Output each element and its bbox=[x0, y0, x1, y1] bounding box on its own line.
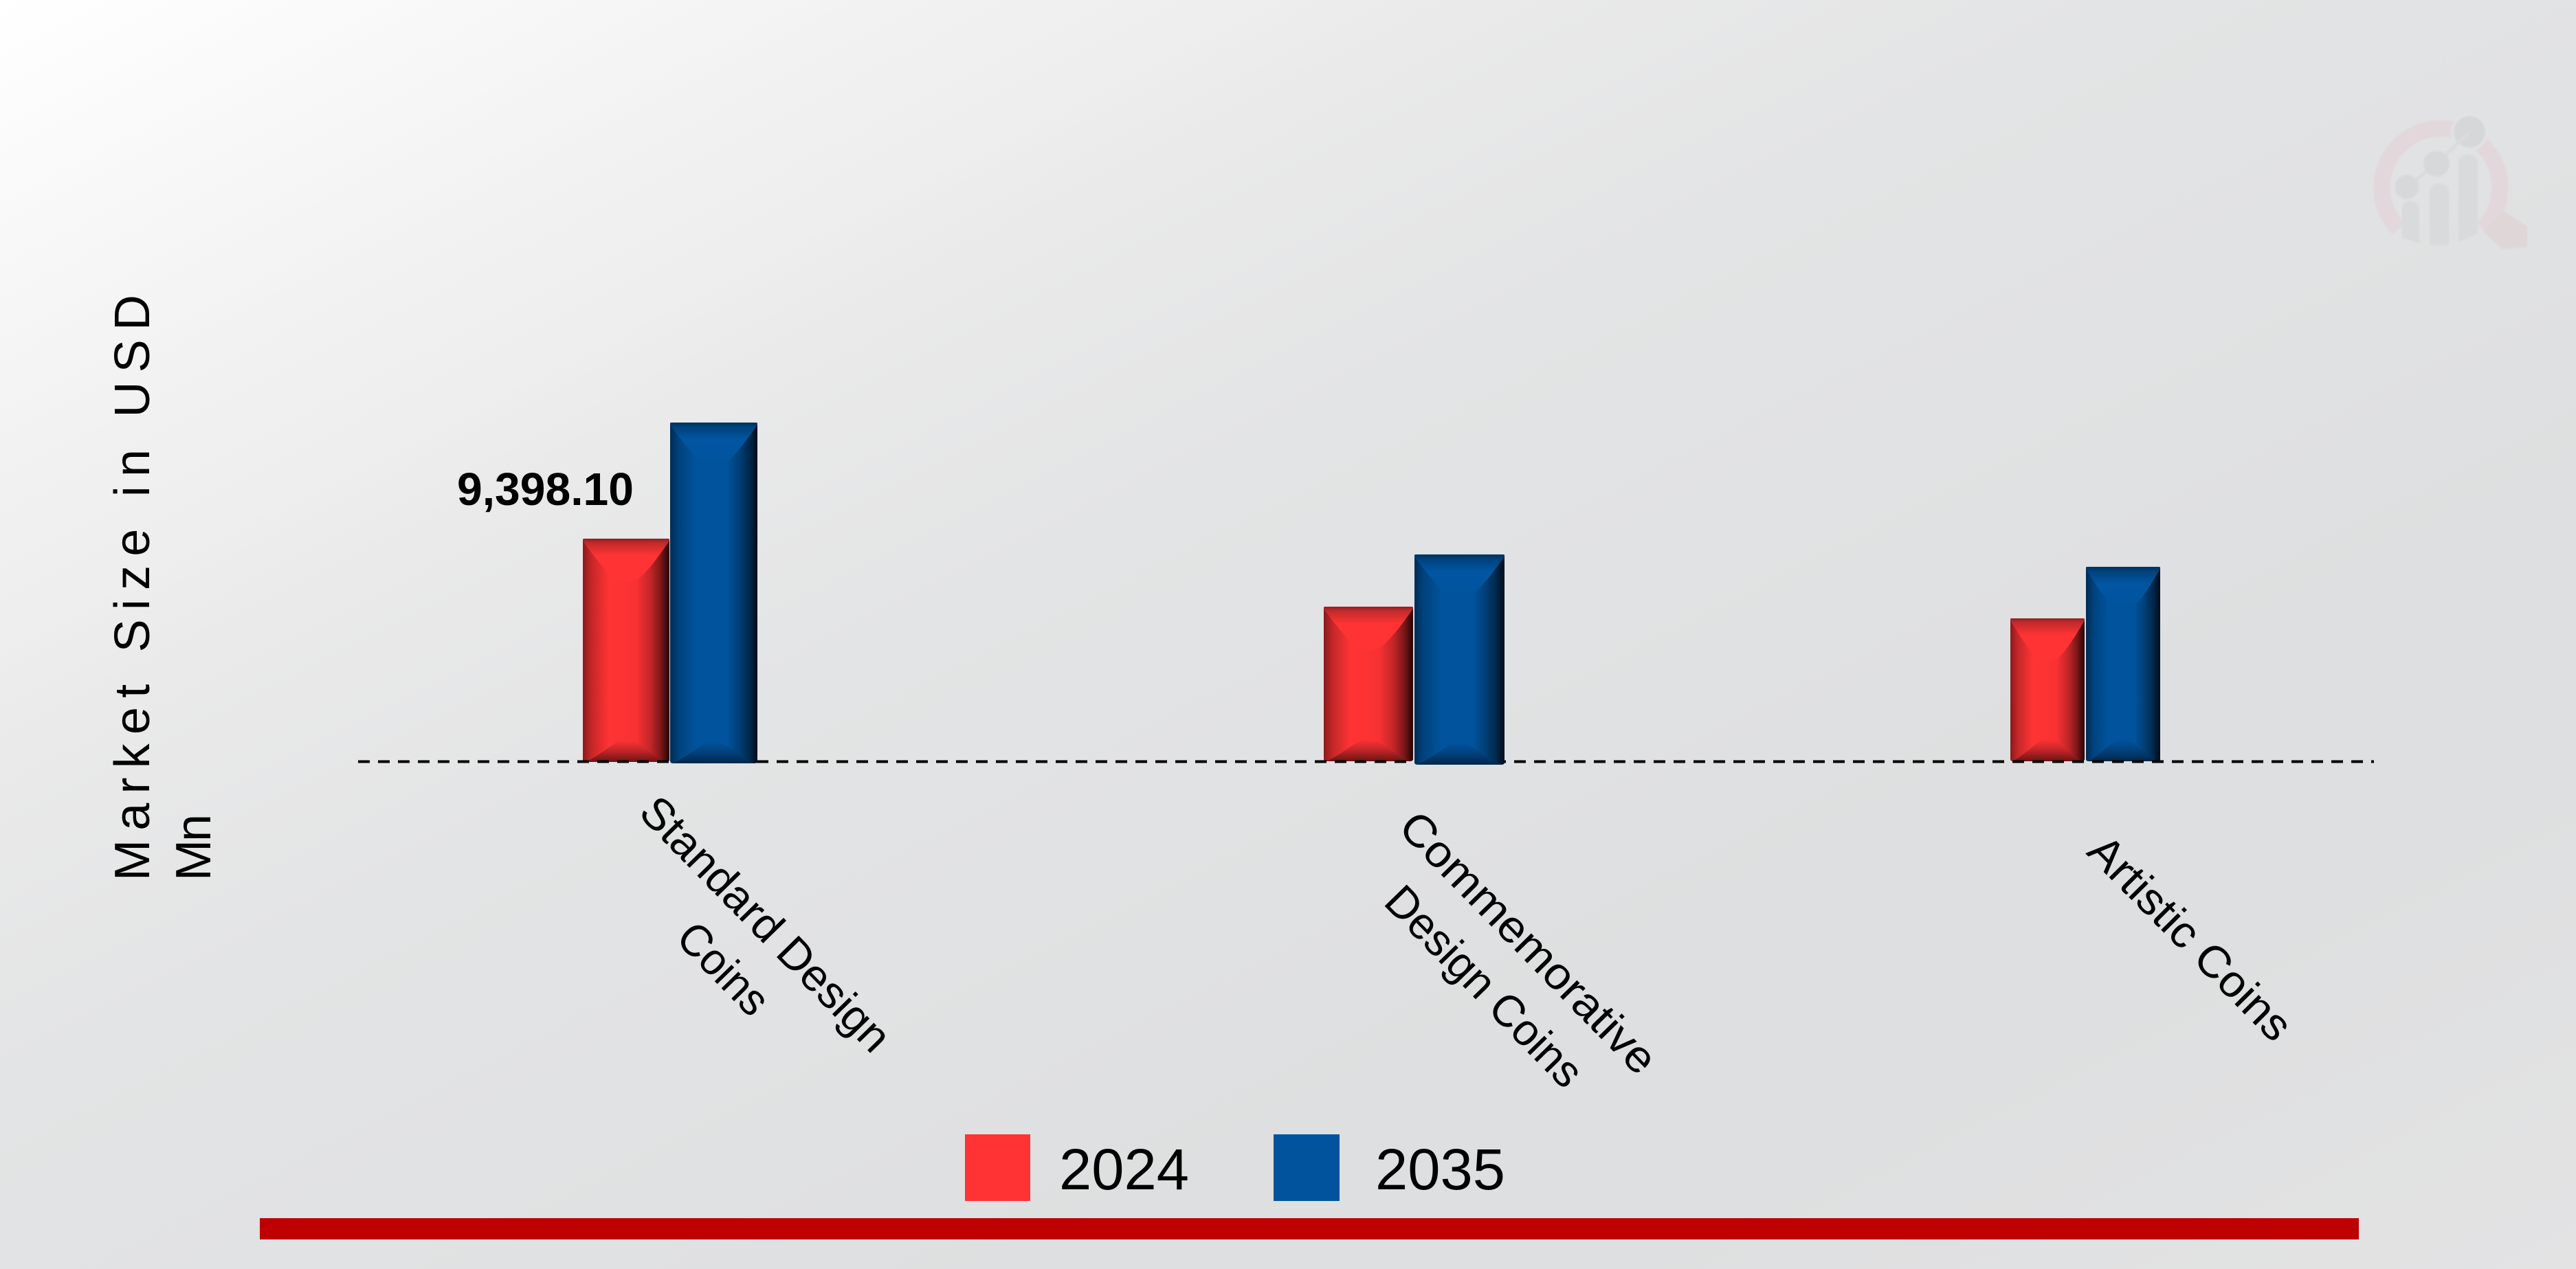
legend swatch: 2035 bbox=[1274, 1134, 1340, 1201]
x-axis label: Artistic Coins: Artistic Coins bbox=[2078, 824, 2302, 1051]
dashed baseline bbox=[358, 760, 2374, 763]
bar: Artistic Coins 2024 bbox=[2010, 618, 2085, 761]
legend label: 2035: 2035 bbox=[1375, 1137, 1505, 1202]
y-axis title: Mn bbox=[166, 814, 221, 881]
legend label: 2024: 2024 bbox=[1059, 1137, 1189, 1202]
icon: watermark logo bbox=[2382, 113, 2527, 249]
data label: 9,398.10: 9,398.10 bbox=[457, 464, 634, 515]
bar: Commemorative Design Coins 2024 bbox=[1324, 607, 1413, 761]
y-axis title bbox=[105, 295, 221, 881]
y-axis title: Market Size in USD bbox=[105, 295, 160, 881]
bar: Standard Design Coins 2035 bbox=[670, 423, 757, 763]
bar: Standard Design Coins 2024 bbox=[583, 539, 669, 762]
x-axis label: Standard Design Coins: Coins bbox=[667, 912, 780, 1025]
bar: Commemorative Design Coins 2035 bbox=[1414, 554, 1504, 765]
legend swatch: 2024 bbox=[965, 1134, 1030, 1201]
bar: Artistic Coins 2035 bbox=[2086, 567, 2160, 761]
x-axis label: Commemorative Design Coins: Commemorative bbox=[1390, 801, 1667, 1083]
x-axis label: Commemorative Design Coins: Design Coins bbox=[1375, 875, 1594, 1097]
x-axis label: Standard Design Coins: Standard Design bbox=[630, 786, 901, 1062]
legend bbox=[965, 1134, 1505, 1202]
footer bar bbox=[260, 1218, 2359, 1239]
